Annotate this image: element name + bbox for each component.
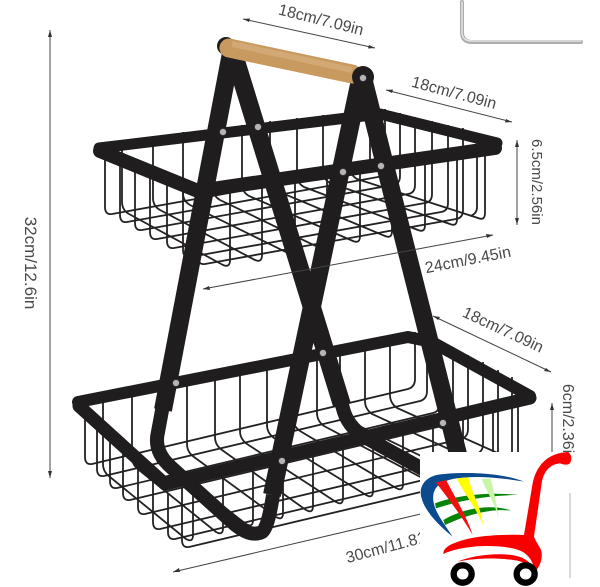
upper basket wires — [105, 106, 485, 266]
dimension: lower length 30cm — [173, 513, 440, 572]
dimension: lower length 30cm: 30cm/11.81in — [344, 526, 440, 567]
dimension: lower height 6cm: 6cm/2.36in — [559, 384, 576, 462]
dimension: upper height 6.5cm: 6.5cm/2.56in — [528, 139, 545, 225]
dimension: handle width 18cm — [243, 2, 375, 49]
logo: shopping cart — [420, 452, 572, 587]
wooden handle — [217, 37, 374, 88]
dimension: upper depth 18cm — [386, 74, 512, 122]
bolts — [172, 74, 446, 464]
dimension: upper length 24cm: 24cm/9.45in — [424, 244, 513, 277]
lower basket wires — [85, 332, 518, 547]
dimension: lower depth 18cm: 18cm/7.09in — [460, 304, 546, 357]
dimension: total height 32cm: 32cm/12.6in — [21, 217, 40, 309]
dimension: lower depth 18cm — [433, 304, 551, 372]
dimension: upper height 6.5cm — [515, 139, 545, 225]
dimension: lower height 6cm — [550, 384, 576, 470]
dimension: upper depth 18cm: 18cm/7.09in — [410, 74, 498, 113]
upper basket rim — [99, 114, 497, 191]
A-frame black legs — [157, 48, 470, 534]
icon: hex key bracket — [462, 2, 581, 42]
dimension: total height 32cm — [21, 30, 52, 478]
dimension: handle width 18cm: 18cm/7.09in — [277, 2, 365, 39]
dimension: upper length 24cm — [203, 234, 513, 290]
lower basket rim — [78, 337, 530, 484]
